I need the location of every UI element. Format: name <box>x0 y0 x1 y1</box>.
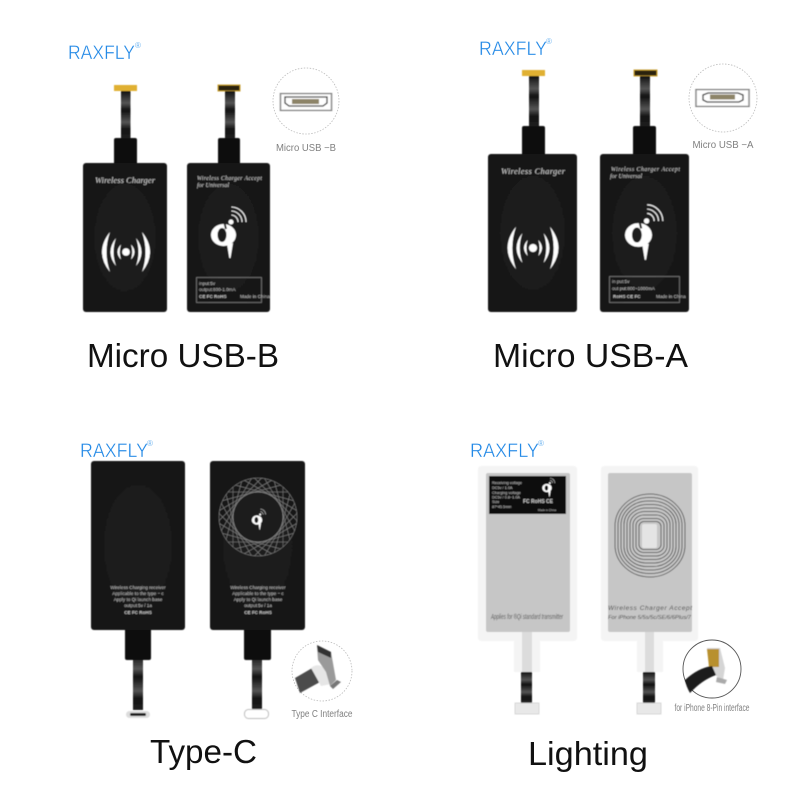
connector inset: Micro USB-A: Micro USB −A <box>692 140 754 151</box>
receiver: back with Qi logo: Made in China <box>240 294 270 299</box>
receiver: front with text: Wireless Charging receiver <box>110 585 166 590</box>
receiver: back with circular pattern: Wireless Charging receiver <box>230 585 286 590</box>
receiver: back with Qi logo: CE FC RoHS <box>199 294 227 299</box>
logo: RAXFLY: ® <box>538 439 544 448</box>
receiver: front with label <box>478 466 577 714</box>
receiver: front with text: output:5v / 1a <box>124 603 152 608</box>
receiver: back with circular pattern: Apply to Qi launch base <box>234 597 283 602</box>
receiver: back with Qi logo <box>600 70 689 312</box>
receiver: front with text: Apply to Qi launch base <box>114 597 163 602</box>
logo: RAXFLY: RAXFLY <box>80 441 148 462</box>
logo: RAXFLY: RAXFLY <box>68 43 135 64</box>
receiver: back with Qi logo: out put:800~1000mA <box>612 286 656 291</box>
connector inset: Micro USB-B <box>273 68 339 154</box>
receiver: back with Qi logo: in put:5v <box>612 279 630 284</box>
receiver: front with text: Applicable to the type − c <box>112 591 164 596</box>
logo: RAXFLY: ® <box>135 41 141 50</box>
receiver: back with Qi logo: for Universal <box>197 182 229 189</box>
receiver: front with label: Made in China <box>538 508 556 512</box>
receiver: front with label: DC5v / 0.8~1.0A <box>492 496 520 500</box>
connector inset: Micro USB-A <box>689 64 757 151</box>
heading: Micro USB-A: Micro USB-A <box>493 337 688 374</box>
receiver: back with circular pattern: Applicable to the type − c <box>232 591 284 596</box>
receiver: front with label: Charging voltage <box>492 491 521 495</box>
receiver: front with label: Receiving voltage <box>492 481 522 485</box>
receiver: back with Qi logo: Wireless Charger Accept <box>197 176 262 182</box>
receiver: front with label: 87*45.5mm <box>492 505 511 509</box>
receiver: front with text: CE FC RoHS <box>124 610 152 615</box>
receiver: front with wireless symbol: Wireless Charger <box>501 166 566 176</box>
logo: RAXFLY: ® <box>546 37 552 46</box>
receiver: front with wireless symbol: Wireless Charger <box>95 175 156 185</box>
connector inset: Lightning: for iPhone 8-Pin interface <box>674 703 750 714</box>
receiver: back with Qi logo: output:800-1.0mA <box>199 287 236 292</box>
receiver: front with label: FC RoHS CE <box>523 499 554 505</box>
receiver: front with label: Applies for ®Qi standard transmitter <box>490 613 563 621</box>
logo: RAXFLY: ® <box>147 439 153 448</box>
receiver: back with coil: Wireless Charger Accept <box>608 605 693 612</box>
panel: Micro USB-B <box>68 41 339 374</box>
heading: Type-C: Type-C <box>150 733 257 770</box>
heading: Lighting: Lighting <box>528 735 648 772</box>
connector inset: Type C: Type C Interface <box>292 709 353 720</box>
receiver: back with Qi logo: RoHS CE FC <box>613 294 641 299</box>
receiver: back with Qi logo: for Universal <box>610 173 642 180</box>
logo: RAXFLY: RAXFLY <box>479 39 547 60</box>
receiver: back with Qi logo <box>187 85 270 312</box>
panel: Lighting <box>470 439 750 772</box>
receiver: front with wireless symbol <box>488 70 577 312</box>
receiver: front with text <box>91 461 185 718</box>
receiver: back with Qi logo: input:5v <box>199 281 216 286</box>
receiver: back with coil <box>601 466 698 714</box>
receiver: back with coil: For iPhone 5/5s/5c/SE/6/6Plus/7 <box>608 615 692 621</box>
receiver: back with circular pattern: output:5v / 1a <box>244 603 272 608</box>
receiver: front with label: Size <box>492 500 499 504</box>
panel: Type-C <box>80 439 353 770</box>
receiver: front with wireless symbol <box>83 85 167 312</box>
panel: Micro USB-A <box>479 37 757 374</box>
connector inset: Type C <box>292 641 353 720</box>
receiver: back with circular pattern <box>210 461 305 718</box>
heading: Micro USB-B: Micro USB-B <box>87 337 279 374</box>
connector inset: Micro USB-B: Micro USB −B <box>276 143 336 154</box>
receiver: back with Qi logo: Made in China <box>656 294 686 299</box>
receiver: back with circular pattern: CE FC RoHS <box>244 610 272 615</box>
logo: RAXFLY: RAXFLY <box>470 441 539 462</box>
connector inset: Lightning <box>674 640 750 714</box>
receiver: front with label: DC5v / 1.0A <box>492 486 513 490</box>
receiver: back with Qi logo: Wireless Charger Accept <box>611 167 680 173</box>
